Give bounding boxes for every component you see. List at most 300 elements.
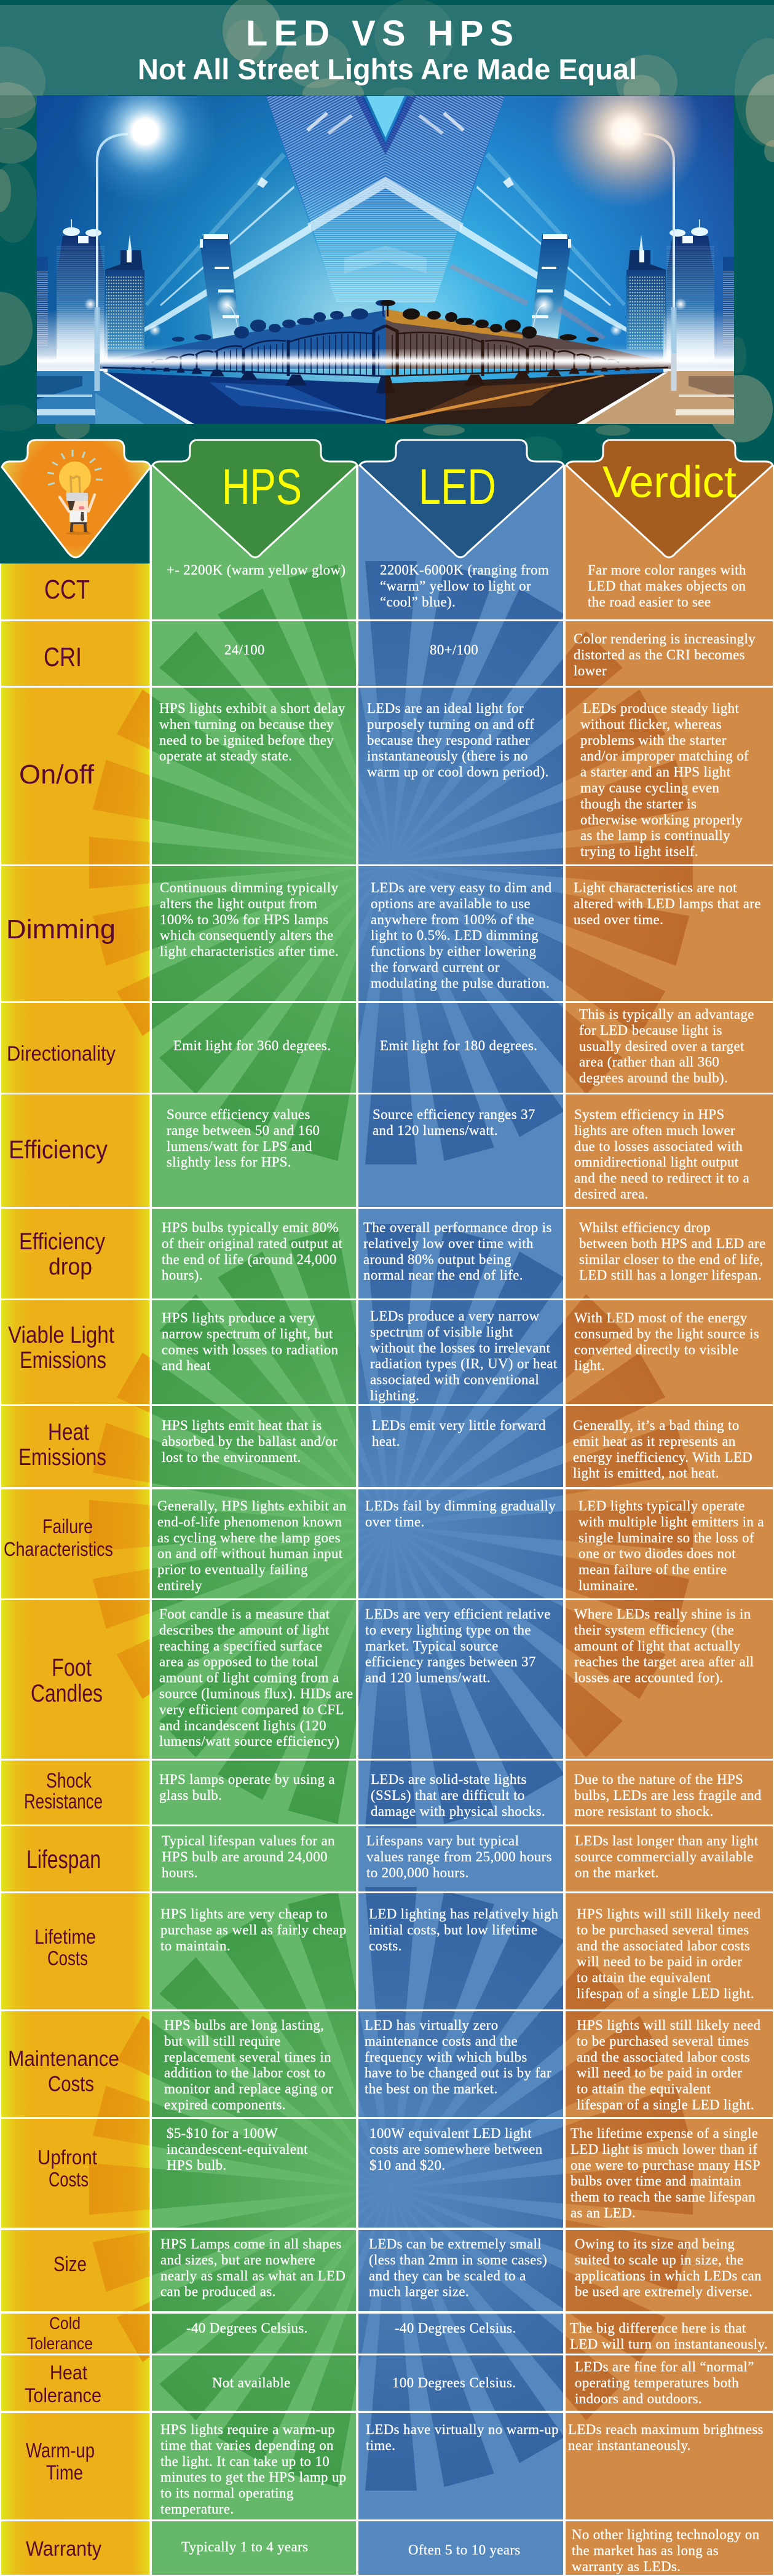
Verdict cell: Efficiency: omnidirectional light output bbox=[574, 1155, 739, 1170]
Verdict cell: Heat Emissions: emit heat as it represents an bbox=[573, 1434, 736, 1449]
HPS cell: Heat Tolerance: Not available bbox=[212, 2375, 291, 2390]
Verdict cell: Maintenance Costs: will need to be paid in order bbox=[577, 2065, 742, 2081]
HPS cell: Directionality: Emit light for 360 degrees. bbox=[173, 1038, 331, 1053]
ground slope right bbox=[385, 318, 671, 369]
LED cell: Heat Tolerance: 100 Degrees Celsius. bbox=[392, 2375, 516, 2390]
row: Size bbox=[53, 2236, 762, 2299]
Verdict cell: Cold Tolerance: The big difference here is that bbox=[570, 2320, 746, 2336]
label: Foot Candles: Candles bbox=[31, 1680, 103, 1707]
Verdict cell: Warranty: the market has as long as bbox=[572, 2543, 719, 2558]
Verdict cell: On/off: though the starter is bbox=[580, 796, 697, 811]
heading: Verdict: Verdict bbox=[602, 458, 736, 507]
HPS cell: Lifespan: hours. bbox=[162, 1865, 198, 1880]
ground slope left bbox=[100, 310, 385, 369]
LED cell: Upfront Costs: $10 and $20. bbox=[369, 2158, 445, 2173]
HPS cell: Failure Characteristics: on and off without human input bbox=[157, 1546, 343, 1561]
LED cell: Dimming: LEDs are very easy to dim and bbox=[371, 880, 552, 895]
LED cell: Upfront Costs: costs are somewhere between bbox=[369, 2142, 543, 2157]
Verdict cell: On/off: as the lamp is continually bbox=[580, 828, 730, 843]
row: CRI bbox=[44, 631, 756, 678]
row: Heat Emissions bbox=[18, 1418, 752, 1481]
LED cell: Warranty: Often 5 to 10 years bbox=[408, 2542, 521, 2558]
Verdict cell: Heat Tolerance: LEDs are fine for all “normal” bbox=[575, 2359, 754, 2374]
LED cell: Failure Characteristics: LEDs fail by dimming gradually bbox=[365, 1498, 556, 1514]
Verdict cell: Heat Emissions: energy inefficiency. With LED bbox=[573, 1450, 752, 1465]
HPS cell: Foot Candles: Foot candle is a measure that bbox=[159, 1606, 330, 1622]
HPS cell: Lifetime Costs: to maintain. bbox=[160, 1938, 231, 1954]
label: Warm-up Time: Time bbox=[46, 2461, 83, 2484]
label: Warm-up Time: Warm-up bbox=[26, 2439, 95, 2462]
Verdict cell: Efficiency drop: between both HPS and LED are bbox=[579, 1236, 766, 1251]
Verdict cell: Upfront Costs: them to reach the same lifespan bbox=[571, 2189, 756, 2205]
row: On/off bbox=[19, 701, 749, 859]
LED cell: CCT: “warm” yellow to light or bbox=[380, 578, 531, 594]
Verdict cell: Foot Candles: their system efficiency (the bbox=[574, 1622, 734, 1638]
Verdict cell: Heat Tolerance: operating temperatures both bbox=[575, 2375, 739, 2390]
LED cell: CCT: “cool” blue). bbox=[380, 594, 456, 610]
LED cell: CCT: 2200K-6000K (ranging from bbox=[380, 562, 549, 578]
label: Cold Tolerance: Tolerance bbox=[27, 2334, 93, 2353]
Verdict cell: Size: be used are extremely diverse. bbox=[575, 2284, 752, 2299]
Verdict cell: Maintenance Costs: and the associated labor costs bbox=[577, 2049, 750, 2065]
LED cell: Cold Tolerance: -40 Degrees Celsius. bbox=[395, 2320, 516, 2336]
HPS cell: Dimming: light characteristics after time. bbox=[160, 944, 339, 959]
LED cell: Efficiency drop: around 80% output being bbox=[363, 1252, 511, 1267]
header arrow: Verdict bbox=[566, 440, 773, 557]
LED cell: Lifetime Costs: costs. bbox=[369, 1938, 402, 1954]
lamp poles on top of trail bbox=[95, 353, 100, 391]
LED cell: Dimming: the forward current or bbox=[371, 960, 500, 975]
row: Failure Characteristics bbox=[4, 1498, 764, 1593]
HPS cell: On/off: operate at steady state. bbox=[159, 748, 292, 764]
Verdict cell: On/off: may cause cycling even bbox=[580, 780, 720, 795]
Verdict cell: Failure Characteristics: LED lights typically operate bbox=[579, 1498, 745, 1514]
Verdict cell: CCT: Far more color ranges with bbox=[588, 562, 746, 578]
HPS cell: Warranty: Typically 1 to 4 years bbox=[181, 2539, 308, 2554]
Verdict cell: Lifetime Costs: and the associated labor costs bbox=[577, 1938, 750, 1954]
bokeh background bbox=[0, 0, 774, 473]
Verdict cell: Efficiency: lights are often much lower bbox=[574, 1123, 735, 1138]
Verdict cell: Lifespan: source commercially available bbox=[575, 1849, 754, 1864]
HPS cell: CRI: 24/100 bbox=[224, 642, 265, 658]
HPS cell: Failure Characteristics: as cycling where the lamp goes bbox=[157, 1530, 341, 1545]
LED cell: On/off: because they respond rather bbox=[367, 732, 530, 748]
LED cell: Size: and they can be scaled to a bbox=[369, 2268, 526, 2283]
Verdict cell: Lifespan: on the market. bbox=[575, 1865, 659, 1880]
HPS cell: Warm-up Time: the light. It can take up to 10 bbox=[160, 2454, 330, 2469]
HPS cell: Warm-up Time: HPS lights require a warm-up bbox=[160, 2422, 335, 2437]
header arrow: icon column bbox=[2, 440, 151, 557]
LED cell: Dimming: modulating the pulse duration. bbox=[371, 975, 550, 991]
Verdict cell: Efficiency: and the need to redirect it to a bbox=[574, 1171, 749, 1186]
HPS cell: Maintenance Costs: but will still require bbox=[164, 2033, 281, 2049]
Verdict cell: Viable Light Emissions: converted directly to visible bbox=[574, 1342, 738, 1357]
HPS cell: Lifespan: Typical lifespan values for an bbox=[162, 1833, 335, 1848]
HPS cell: Dimming: 100% to 30% for HPS lamps bbox=[160, 912, 329, 927]
HPS cell: Efficiency drop: HPS bulbs typically emit 80% bbox=[162, 1220, 339, 1235]
HPS cell: Efficiency drop: hours). bbox=[162, 1268, 203, 1283]
HPS cell: Viable Light Emissions: HPS lights produce a very bbox=[162, 1310, 315, 1325]
row: Warm-up Time bbox=[26, 2422, 764, 2517]
Verdict cell: Cold Tolerance: LED will turn on instantaneously. bbox=[570, 2336, 768, 2352]
Verdict cell: Lifetime Costs: to be purchased several times bbox=[577, 1922, 749, 1938]
LED cell: Warm-up Time: LEDs have virtually no warm-up bbox=[366, 2422, 559, 2437]
HPS cell: Viable Light Emissions: narrow spectrum of light, but bbox=[162, 1326, 333, 1341]
LED cell: Foot Candles: efficiency ranges between 37 bbox=[365, 1654, 536, 1670]
Verdict cell: Dimming: altered with LED lamps that are bbox=[574, 896, 761, 911]
LED cell: Shock Resistance: (SSLs) that are difficult to bbox=[371, 1788, 525, 1803]
LED cell: Lifespan: Lifespans vary but typical bbox=[366, 1833, 519, 1848]
header arrow: LED bbox=[360, 440, 564, 557]
HPS cell: Upfront Costs: incandescent-equivalent bbox=[167, 2142, 308, 2157]
LED cell: Efficiency drop: The overall performance drop is bbox=[363, 1220, 552, 1235]
HPS cell: Cold Tolerance: -40 Degrees Celsius. bbox=[186, 2320, 308, 2336]
row: Viable Light Emissions bbox=[8, 1308, 759, 1404]
Verdict cell: Efficiency: due to losses associated with bbox=[574, 1139, 743, 1154]
heading: LED: LED bbox=[419, 459, 496, 515]
HPS cell: Efficiency: Source efficiency values bbox=[167, 1107, 310, 1122]
LED cell: Size: much larger size. bbox=[369, 2284, 469, 2299]
LED cell: Efficiency drop: normal near the end of life. bbox=[363, 1268, 523, 1283]
label: Efficiency drop: Efficiency bbox=[19, 1229, 105, 1255]
HPS cell: Failure Characteristics: entirely bbox=[157, 1578, 202, 1593]
HPS cell: Maintenance Costs: addition to the labor cost to bbox=[164, 2065, 325, 2081]
LED cell: Dimming: anywhere from 100% of the bbox=[371, 912, 534, 927]
HPS cell: On/off: HPS lights exhibit a short delay bbox=[159, 701, 346, 716]
Verdict cell: CCT: the road easier to see bbox=[588, 594, 711, 610]
label: Failure Characteristics: Characteristics bbox=[4, 1538, 113, 1560]
LED cell: Viable Light Emissions: lighting. bbox=[370, 1388, 419, 1404]
Verdict cell: Efficiency drop: LED still has a longer lifespan. bbox=[579, 1268, 762, 1283]
warm pink streaks, right half bbox=[449, 264, 529, 306]
HPS cell: Lifetime Costs: HPS lights are very cheap to bbox=[160, 1906, 328, 1922]
row: Efficiency drop bbox=[19, 1220, 766, 1283]
Verdict cell: Lifetime Costs: to attain the equivalent bbox=[577, 1970, 711, 1985]
LED cell: Size: LEDs can be extremely small bbox=[369, 2236, 542, 2252]
fence bbox=[103, 326, 385, 393]
icon: light bulb with rays bbox=[47, 450, 103, 495]
Verdict cell: Maintenance Costs: to be purchased several times bbox=[577, 2033, 749, 2049]
LED cell: Lifetime Costs: initial costs, but low lifetime bbox=[369, 1922, 538, 1938]
row: Warranty bbox=[26, 2527, 760, 2574]
LED cell: Lifespan: to 200,000 hours. bbox=[366, 1865, 469, 1880]
row: Upfront Costs bbox=[38, 2126, 760, 2221]
Verdict cell: On/off: and/or improper matching of bbox=[580, 748, 749, 764]
HPS cell: Warm-up Time: time that varies depending on bbox=[160, 2438, 334, 2453]
label: Warranty: Warranty bbox=[26, 2537, 101, 2561]
LED cell: Foot Candles: market. Typical source bbox=[365, 1638, 499, 1654]
Verdict cell: Viable Light Emissions: With LED most of the energy bbox=[574, 1310, 748, 1325]
Verdict cell: CRI: Color rendering is increasingly bbox=[574, 631, 756, 646]
Verdict cell: Upfront Costs: one were to purchase many HSP bbox=[571, 2158, 760, 2173]
label: Viable Light Emissions: Viable Light bbox=[8, 1322, 114, 1348]
LED cell: Efficiency: and 120 lumens/watt. bbox=[373, 1123, 498, 1138]
HPS cell: Viable Light Emissions: comes with losses to radiation bbox=[162, 1342, 339, 1357]
Verdict cell: Size: applications in which LEDs can bbox=[575, 2268, 762, 2283]
Verdict cell: Upfront Costs: as an LED. bbox=[571, 2205, 636, 2221]
HPS cell: Warm-up Time: temperature. bbox=[160, 2501, 234, 2517]
Verdict cell: Foot Candles: reaches the target area after all bbox=[574, 1654, 754, 1670]
row: Dimming bbox=[6, 880, 761, 991]
Verdict cell: Efficiency: desired area. bbox=[574, 1186, 649, 1202]
LED cell: Foot Candles: and 120 lumens/watt. bbox=[365, 1670, 491, 1686]
HPS cell: Shock Resistance: glass bulb. bbox=[159, 1788, 222, 1803]
Verdict cell: Failure Characteristics: single luminaire so the loss of bbox=[579, 1530, 754, 1545]
HPS cell: CCT: +- 2200K (warm yellow glow) bbox=[167, 562, 346, 578]
label: Lifetime Costs: Lifetime bbox=[34, 1925, 96, 1948]
row: Maintenance Costs bbox=[8, 2017, 761, 2113]
LED cell: On/off: warm up or cool down period). bbox=[367, 764, 549, 780]
HPS cell: Efficiency drop: the end of life (around 24,000 bbox=[162, 1252, 337, 1267]
title band bbox=[0, 5, 774, 95]
Verdict cell: Dimming: Light characteristics are not bbox=[574, 880, 737, 895]
LED cell: On/off: purposely turning on and off bbox=[367, 717, 534, 732]
Verdict cell: On/off: LEDs produce steady light bbox=[583, 701, 739, 716]
glow behind fence bbox=[100, 349, 672, 370]
Verdict cell: On/off: a starter and an HPS light bbox=[580, 764, 731, 780]
LED cell: Maintenance Costs: have to be changed out is by far bbox=[365, 2065, 551, 2081]
Verdict cell: Directionality: degrees around the bulb). bbox=[579, 1070, 728, 1086]
label: Directionality: Directionality bbox=[7, 1042, 116, 1066]
Verdict cell: Efficiency: System efficiency in HPS bbox=[574, 1107, 725, 1122]
heading: LED VS HPS: LED VS HPS bbox=[246, 14, 513, 53]
Verdict cell: Viable Light Emissions: light. bbox=[574, 1358, 605, 1373]
Verdict cell: Warranty: No other lighting technology on bbox=[572, 2527, 760, 2542]
Verdict cell: Lifespan: LEDs last longer than any light bbox=[575, 1833, 759, 1848]
Verdict cell: Failure Characteristics: one or two diodes does not bbox=[579, 1546, 736, 1561]
HPS cell: Dimming: Continuous dimming typically bbox=[160, 880, 339, 895]
Verdict cell: Upfront Costs: bulbs over time and maintain bbox=[571, 2174, 741, 2189]
label: Cold Tolerance: Cold bbox=[49, 2314, 81, 2333]
row: CCT bbox=[44, 562, 746, 610]
Verdict cell: Shock Resistance: more resistant to shock. bbox=[574, 1804, 714, 1819]
Verdict cell: CCT: LED that makes objects on bbox=[588, 578, 746, 594]
Verdict cell: Heat Tolerance: indoors and outdoors. bbox=[575, 2391, 702, 2406]
LED cell: Shock Resistance: damage with physical shocks. bbox=[371, 1804, 545, 1819]
LED cell: Maintenance Costs: the best on the market. bbox=[365, 2081, 498, 2097]
label: Size: Size bbox=[53, 2253, 87, 2276]
label: Shock Resistance: Shock bbox=[46, 1769, 92, 1793]
LED cell: Efficiency drop: relatively low over time with bbox=[363, 1236, 534, 1251]
Verdict cell: Viable Light Emissions: consumed by the light source is bbox=[574, 1326, 759, 1341]
HPS cell: Heat Emissions: absorbed by the ballast and/or bbox=[162, 1434, 338, 1449]
LED cell: Shock Resistance: LEDs are solid-state lights bbox=[371, 1772, 527, 1787]
HPS cell: Size: and sizes, but are nowhere bbox=[160, 2252, 315, 2268]
Verdict cell: Size: Owing to its size and being bbox=[575, 2236, 735, 2252]
LED cell: Lifetime Costs: LED lighting has relatively high bbox=[369, 1906, 559, 1922]
Verdict cell: Heat Emissions: light is emitted, not heat. bbox=[573, 1466, 719, 1481]
row: Heat Tolerance bbox=[25, 2359, 754, 2406]
row: Efficiency bbox=[9, 1107, 749, 1202]
plaza left bbox=[37, 371, 192, 424]
HPS cell: Size: can be produced as. bbox=[160, 2284, 276, 2299]
heading: subtitle: Not All Street Lights Are Made Equal bbox=[138, 53, 637, 85]
HPS cell: On/off: need to be ignited before they bbox=[159, 732, 334, 748]
LED cell: Viable Light Emissions: LEDs produce a very narrow bbox=[370, 1308, 540, 1324]
label: Efficiency: Efficiency bbox=[9, 1135, 108, 1164]
row: Lifespan bbox=[26, 1833, 759, 1880]
row: Cold Tolerance bbox=[27, 2314, 768, 2353]
Verdict cell: Upfront Costs: The lifetime expense of a single bbox=[571, 2126, 758, 2141]
Verdict cell: Maintenance Costs: lifespan of a single LED light. bbox=[577, 2097, 754, 2113]
Verdict cell: Warm-up Time: near instantaneously. bbox=[568, 2438, 691, 2453]
label: CCT: CCT bbox=[44, 575, 90, 605]
sunburst rays bbox=[89, 561, 693, 2491]
header arrow: HPS bbox=[152, 440, 357, 557]
Verdict cell: Foot Candles: Where LEDs really shine is in bbox=[574, 1606, 751, 1622]
Verdict cell: Efficiency drop: similar closer to the end of life, bbox=[579, 1252, 764, 1267]
LED cell: Maintenance Costs: LED has virtually zero bbox=[365, 2017, 499, 2033]
label: Lifespan: Lifespan bbox=[26, 1845, 101, 1874]
HPS cell: Upfront Costs: $5-$10 for a 100W bbox=[167, 2126, 278, 2141]
LED cell: Viable Light Emissions: without the losses to irrelevant bbox=[370, 1340, 551, 1356]
HPS cell: Foot Candles: very efficient compared to CFL bbox=[159, 1702, 344, 1717]
LED cell: Viable Light Emissions: radiation types (IR, UV) or heat bbox=[370, 1356, 558, 1372]
HPS cell: Efficiency: range between 50 and 160 bbox=[167, 1123, 320, 1138]
label: Heat Emissions: Emissions bbox=[18, 1445, 106, 1471]
road right bbox=[385, 372, 668, 424]
LED cell: Viable Light Emissions: spectrum of visible light bbox=[370, 1324, 513, 1340]
label: Failure Characteristics: Failure bbox=[42, 1515, 93, 1537]
HPS cell: On/off: when turning on because they bbox=[159, 717, 334, 732]
label: Heat Tolerance: Heat bbox=[50, 2362, 87, 2384]
HPS cell: Shock Resistance: HPS lamps operate by using a bbox=[159, 1772, 335, 1787]
LED cell: On/off: instantaneously (there is no bbox=[367, 748, 528, 764]
label: Shock Resistance: Resistance bbox=[24, 1790, 103, 1813]
label: Maintenance Costs: Maintenance bbox=[8, 2047, 119, 2071]
LED cell: Maintenance Costs: frequency with which bulbs bbox=[365, 2049, 527, 2065]
LED cell: Efficiency: Source efficiency ranges 37 bbox=[373, 1107, 535, 1122]
HPS cell: Foot Candles: reaching a specified surface bbox=[159, 1638, 323, 1654]
LED cell: Heat Emissions: LEDs emit very little forward bbox=[372, 1418, 546, 1433]
label: Upfront Costs: Costs bbox=[49, 2168, 89, 2191]
HPS cell: Efficiency: lumens/watt for LPS and bbox=[167, 1139, 312, 1154]
Verdict cell: CRI: distorted as the CRI becomes bbox=[574, 647, 745, 662]
label: Dimming: Dimming bbox=[6, 914, 116, 944]
light trail bbox=[37, 355, 734, 366]
Verdict cell: Heat Emissions: Generally, it’s a bad thing to bbox=[573, 1418, 740, 1433]
LED cell: Dimming: options are available to use bbox=[371, 896, 531, 911]
Verdict cell: On/off: without flicker, whereas bbox=[580, 717, 722, 732]
LED cell: Lifespan: values range from 25,000 hours bbox=[366, 1849, 552, 1864]
Verdict cell: Lifetime Costs: HPS lights will still likely need bbox=[577, 1906, 761, 1922]
HPS cell: Foot Candles: amount of light coming from a bbox=[159, 1670, 339, 1686]
label: Foot Candles: Foot bbox=[52, 1654, 92, 1681]
label: On/off: On/off bbox=[19, 760, 95, 790]
Verdict cell: Lifetime Costs: lifespan of a single LED light. bbox=[577, 1986, 754, 2001]
Verdict cell: Maintenance Costs: HPS lights will still likely need bbox=[577, 2017, 761, 2033]
Verdict cell: CRI: lower bbox=[574, 663, 607, 678]
HPS cell: Efficiency: slightly less for HPS. bbox=[167, 1155, 291, 1170]
LED cell: Maintenance Costs: maintenance costs and the bbox=[365, 2033, 518, 2049]
HPS cell: Efficiency drop: of their original rated output at bbox=[162, 1236, 343, 1251]
row: Lifetime Costs bbox=[34, 1906, 761, 2001]
Verdict cell: Foot Candles: amount of light that actually bbox=[574, 1638, 741, 1654]
Verdict cell: Warranty: warranty as LEDs. bbox=[572, 2559, 681, 2574]
Verdict cell: Dimming: used over time. bbox=[574, 912, 663, 927]
plaza right bbox=[579, 371, 734, 424]
HPS cell: Foot Candles: source (luminous flux). HIDs are bbox=[159, 1686, 353, 1701]
Verdict cell: Size: suited to scale up in size, the bbox=[575, 2252, 743, 2268]
HPS cell: Foot Candles: area as opposed to the total bbox=[159, 1654, 318, 1670]
LED cell: On/off: LEDs are an ideal light for bbox=[367, 701, 524, 716]
lamp glow right bbox=[552, 96, 700, 205]
HPS cell: Foot Candles: lumens/watt source efficiency) bbox=[159, 1734, 339, 1749]
HPS cell: Maintenance Costs: monitor and replace aging or bbox=[164, 2081, 333, 2097]
HPS cell: Dimming: which consequently alters the bbox=[160, 928, 333, 943]
Verdict cell: Shock Resistance: bulbs, LEDs are less fragile and bbox=[574, 1788, 762, 1803]
Verdict cell: Warm-up Time: LEDs reach maximum brightness bbox=[568, 2422, 764, 2437]
Verdict cell: Efficiency drop: Whilst efficiency drop bbox=[579, 1220, 711, 1235]
HPS cell: Failure Characteristics: prior to eventually failing bbox=[157, 1562, 308, 1577]
lamp glow left bbox=[80, 96, 207, 194]
Verdict cell: On/off: otherwise working properly bbox=[580, 812, 743, 827]
LED cell: Viable Light Emissions: associated with conventional bbox=[370, 1372, 539, 1388]
HPS cell: Foot Candles: and incandescent lights (120 bbox=[159, 1718, 326, 1733]
LED cell: CRI: 80+/100 bbox=[430, 642, 478, 658]
HPS cell: Upfront Costs: HPS bulb. bbox=[167, 2158, 227, 2173]
label: Heat Tolerance: Tolerance bbox=[25, 2384, 101, 2406]
LED cell: Dimming: light to 0.5%. LED dimming bbox=[371, 928, 539, 943]
HPS cell: Maintenance Costs: expired components. bbox=[164, 2097, 286, 2113]
label: Upfront Costs: Upfront bbox=[38, 2146, 97, 2169]
Verdict cell: Directionality: usually desired over a target bbox=[579, 1039, 744, 1054]
Verdict cell: Upfront Costs: LED light is much lower than if bbox=[571, 2142, 757, 2157]
Verdict cell: Directionality: This is typically an advantage bbox=[579, 1007, 754, 1022]
Verdict cell: Failure Characteristics: mean failure of the entire bbox=[579, 1562, 727, 1577]
HPS cell: Failure Characteristics: end-of-life phenomenon known bbox=[157, 1514, 342, 1530]
heading: HPS: HPS bbox=[222, 459, 302, 515]
Verdict cell: Failure Characteristics: luminaire. bbox=[579, 1578, 638, 1593]
Verdict cell: Maintenance Costs: to attain the equivalent bbox=[577, 2081, 711, 2097]
HPS cell: Viable Light Emissions: and heat bbox=[162, 1358, 211, 1373]
LED cell: Foot Candles: LEDs are very efficient relative bbox=[365, 1606, 551, 1622]
icon: cheering man bbox=[60, 493, 95, 535]
LED cell: Warm-up Time: time. bbox=[366, 2438, 395, 2453]
row: Shock Resistance bbox=[24, 1769, 762, 1819]
row: Directionality bbox=[7, 1007, 754, 1086]
trees bbox=[172, 300, 390, 342]
HPS cell: Failure Characteristics: Generally, HPS lights exhibit an bbox=[157, 1498, 347, 1514]
Verdict cell: On/off: problems with the starter bbox=[580, 732, 727, 748]
LED cell: Dimming: functions by either lowering bbox=[371, 944, 536, 959]
hero image: mirrored street scene at night bbox=[37, 96, 734, 424]
HPS cell: Maintenance Costs: HPS bulbs are long lasting, bbox=[164, 2017, 324, 2033]
Verdict cell: Foot Candles: losses are accounted for). bbox=[574, 1670, 724, 1686]
LED cell: Failure Characteristics: over time. bbox=[365, 1514, 425, 1530]
label: Lifetime Costs: Costs bbox=[47, 1947, 88, 1969]
HPS cell: Size: nearly as small as what an LED bbox=[160, 2268, 346, 2283]
Verdict cell: Lifetime Costs: will need to be paid in order bbox=[577, 1954, 742, 1969]
Verdict cell: On/off: trying to light itself. bbox=[580, 844, 698, 859]
HPS cell: Heat Emissions: lost to the environment. bbox=[162, 1450, 301, 1465]
LED cell: Heat Emissions: heat. bbox=[372, 1434, 400, 1449]
label: CRI: CRI bbox=[44, 642, 82, 672]
HPS cell: Size: HPS Lamps come in all shapes bbox=[160, 2236, 342, 2252]
Verdict cell: Shock Resistance: Due to the nature of the HPS bbox=[574, 1772, 743, 1787]
HPS cell: Maintenance Costs: replacement several times in bbox=[164, 2049, 331, 2065]
HPS cell: Dimming: alters the light output from bbox=[160, 896, 317, 911]
HPS cell: Warm-up Time: minutes to get the HPS lamp up bbox=[160, 2470, 347, 2485]
label: Efficiency drop: drop bbox=[49, 1254, 92, 1280]
Verdict cell: Failure Characteristics: with multiple light emitters in a bbox=[579, 1514, 764, 1530]
LED cell: Upfront Costs: 100W equivalent LED light bbox=[369, 2126, 532, 2141]
label: Maintenance Costs: Costs bbox=[48, 2072, 94, 2096]
label: Viable Light Emissions: Emissions bbox=[20, 1348, 106, 1373]
HPS cell: Warm-up Time: to its normal operating bbox=[160, 2486, 294, 2501]
LED cell: Directionality: Emit light for 180 degrees. bbox=[380, 1038, 537, 1053]
LED cell: Size: (less than 2mm in some cases) bbox=[369, 2252, 547, 2268]
